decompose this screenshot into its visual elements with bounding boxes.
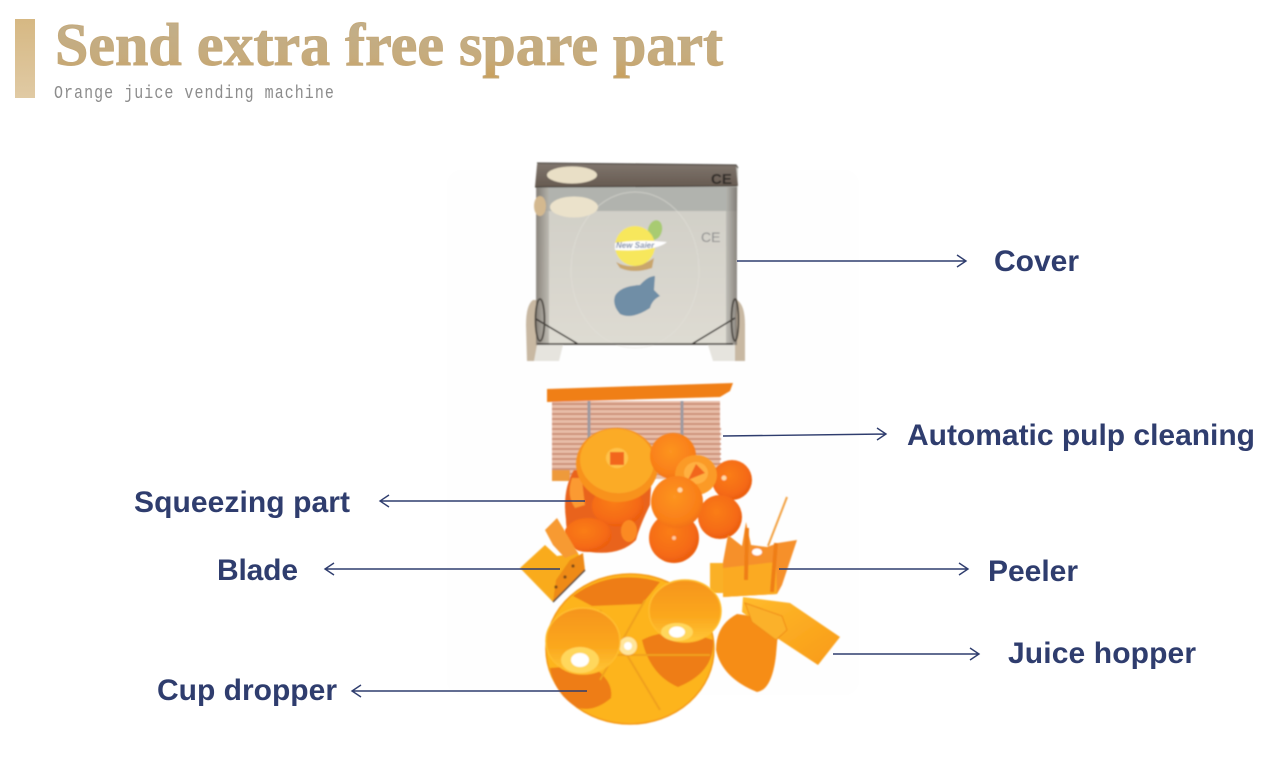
part: peeler <box>710 497 797 597</box>
callout: Squeezing part: Squeezing part <box>134 486 350 519</box>
CE marks: CE <box>711 171 732 188</box>
callout: Cover <box>737 245 1079 278</box>
callout: Juice hopper <box>833 637 1196 670</box>
lid dome outline <box>571 192 699 348</box>
callout: Automatic pulp cleaning <box>723 419 1255 452</box>
subtitle: Orange juice vending machine <box>54 84 334 105</box>
part: juice hopper <box>716 597 840 692</box>
callout: Peeler: Peeler <box>988 555 1078 588</box>
rack slats <box>552 401 721 481</box>
hopper funnel <box>716 614 778 692</box>
callout: Blade: Blade <box>217 554 298 587</box>
cover feet <box>526 300 745 361</box>
callout: Blade <box>217 554 560 587</box>
cover straps <box>536 318 735 344</box>
loose cups <box>649 433 752 563</box>
cover body <box>537 163 738 345</box>
hopper pipe <box>742 597 840 665</box>
cover top band <box>535 163 738 187</box>
accent bar <box>15 19 35 98</box>
callout: Peeler <box>779 555 1078 588</box>
cover windows <box>547 166 597 184</box>
faint photo background <box>447 170 859 695</box>
title: Send extra free spare part <box>55 12 723 78</box>
logo: New Saier <box>616 241 655 250</box>
part: squeezing balls <box>564 423 752 563</box>
callout: Juice hopper: Juice hopper <box>1008 637 1196 670</box>
cup left <box>546 608 620 674</box>
disc <box>546 574 714 724</box>
rack top bar <box>547 383 733 402</box>
part: cup dropper <box>546 574 721 724</box>
squeezer body <box>564 423 663 553</box>
callout: Cup dropper <box>157 674 587 707</box>
callout: Squeezing part <box>134 486 585 519</box>
callout: Cover: Cover <box>994 245 1079 278</box>
part: pulp cleaning rack <box>547 383 733 481</box>
logo <box>615 219 667 271</box>
part: cover <box>526 163 745 361</box>
reflection <box>614 276 660 316</box>
callout: Automatic pulp cleaning: Automatic pulp cleaning <box>907 419 1255 452</box>
callout: Cup dropper: Cup dropper <box>157 674 337 707</box>
part: blade <box>520 518 585 602</box>
part: cover: CE <box>701 229 720 245</box>
cup right <box>649 580 721 642</box>
